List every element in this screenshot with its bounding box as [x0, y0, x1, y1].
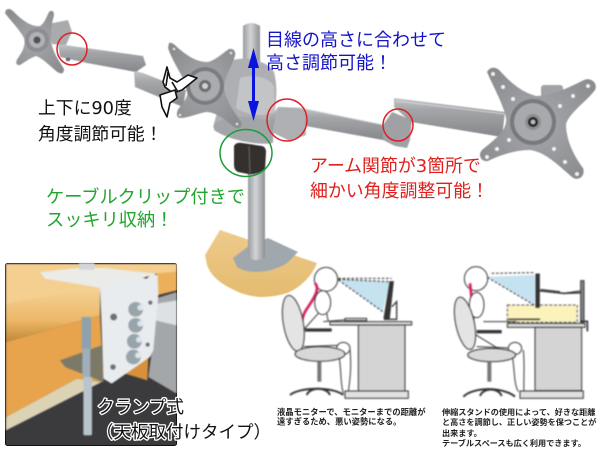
clamp caption: （天板取付けタイプ） [96, 422, 271, 442]
blue height arrow [248, 48, 259, 121]
heading: arm joints: 細かい角度調整可能！ [310, 181, 489, 201]
desk sample with base plate [205, 230, 317, 297]
desk front edge [6, 287, 100, 342]
desk [507, 323, 585, 327]
heading: height adjustment: 目線の高さに合わせて [266, 30, 446, 50]
free space highlight [507, 305, 577, 322]
person [464, 267, 488, 291]
desk side [6, 315, 103, 417]
caption: good posture: と高さを調節し、正しい姿勢を保つことが [442, 417, 596, 427]
cable clip [234, 143, 266, 174]
heading: height adjustment: 高さ調節可能！ [266, 53, 392, 73]
left mount plate [5, 9, 64, 73]
arm right inner [270, 107, 383, 141]
bracket [100, 274, 158, 384]
panel: clamp photo [6, 263, 177, 446]
tilt rotation arrow icon [160, 67, 197, 117]
viewing cone [338, 279, 390, 312]
caption: bad posture: 液晶モニターで、モニターまでの距離が [277, 407, 426, 417]
right mount stub [541, 85, 563, 97]
caption: good posture: 出来ます。 [442, 428, 482, 438]
heading: cable clip: スッキリ収納！ [46, 210, 173, 230]
desk surface [6, 264, 177, 305]
threaded rod [82, 317, 91, 350]
right mount plate [480, 68, 596, 179]
skirting [6, 379, 102, 430]
top plate [40, 268, 157, 289]
caption: good posture: テーブルスペースも広く利用できます。 [442, 438, 586, 448]
monitor and stand [536, 274, 539, 307]
caption: good posture: 伸縮スタンドの使用によって、好きな距離 [442, 408, 595, 417]
person [314, 267, 338, 291]
hub [213, 59, 276, 144]
clamp caption: クランプ式 [97, 397, 184, 417]
lower plate [60, 345, 103, 382]
heading: cable clip: ケーブルクリップ付きで [46, 187, 245, 207]
arm left [58, 44, 146, 72]
viewing cone [487, 275, 535, 305]
monitor [384, 282, 393, 318]
heading: tilt adjustment: 角度調節可能！ [38, 124, 162, 144]
red circle: arm joint 2 [267, 99, 307, 141]
heading: arm joints: アーム関節が3箇所で [310, 156, 481, 177]
red circle: arm joint 3 [383, 109, 413, 141]
diagram: good posture [450, 267, 587, 398]
diagram: bad posture [279, 267, 412, 398]
chair [450, 295, 480, 351]
chair [279, 294, 308, 353]
monitor stand [5, 9, 596, 260]
middle mount plate [168, 43, 241, 128]
arm right outer [394, 98, 505, 137]
far desk [157, 271, 177, 295]
grey partition [148, 292, 177, 394]
red circle: arm joint 1 [57, 33, 87, 65]
desk [330, 322, 412, 325]
caption: bad posture: 遠すぎるため、悪い姿勢になる。 [277, 416, 401, 426]
pole [243, 23, 260, 90]
green circle: cable clip [220, 130, 272, 176]
heading: tilt adjustment: 上下に90度 [38, 98, 132, 119]
